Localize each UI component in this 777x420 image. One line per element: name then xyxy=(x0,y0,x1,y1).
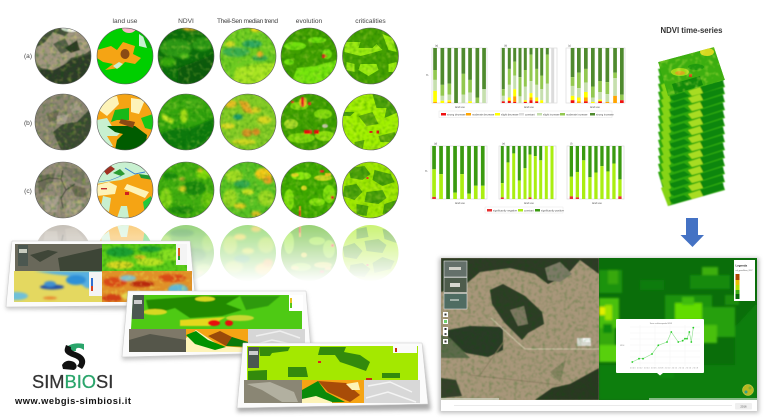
b trend xyxy=(220,94,276,150)
stacked bars chart d xyxy=(432,146,485,199)
circle grid: row b xyxy=(35,94,398,150)
row labels: (c) xyxy=(24,188,32,195)
b evolution xyxy=(281,94,337,150)
logo wordmark: SIMBIOSI xyxy=(32,371,113,392)
b land use xyxy=(97,94,153,150)
time slider bar xyxy=(441,400,757,411)
chart labels: land use xyxy=(592,201,602,205)
a land use xyxy=(97,23,153,84)
satellite map xyxy=(441,258,599,400)
a criticalities xyxy=(342,28,398,84)
legend row 1: moderate decrease xyxy=(472,112,495,116)
heading: column titles: Theil-Sen median trend xyxy=(217,18,278,25)
mini NDVI gauge xyxy=(742,384,754,396)
panel: map card 1 xyxy=(4,241,198,310)
b NDVI xyxy=(158,94,214,150)
stacked bars chart f xyxy=(570,146,622,199)
panel: map card 3 xyxy=(237,343,431,412)
chart labels: (a) xyxy=(435,44,438,48)
chart labels: % xyxy=(426,73,429,77)
chart labels: land use xyxy=(524,105,534,109)
popup line chart: Serie multitemporale NDVI xyxy=(650,322,673,325)
circle grid: row a xyxy=(35,23,398,84)
chart labels xyxy=(426,44,600,109)
row labels: (a) xyxy=(24,53,32,60)
heading: column titles xyxy=(113,18,386,25)
title: NDVI time-series: NDVI time-series xyxy=(661,26,723,35)
NDVI raster map xyxy=(599,258,757,400)
legend row 2: significantly positive xyxy=(541,208,564,212)
satellite strip xyxy=(15,244,102,271)
chart frames xyxy=(432,48,625,103)
stacked bars chart a xyxy=(433,48,486,103)
heading: column titles: criticalities xyxy=(355,18,386,25)
chart labels xyxy=(425,142,602,205)
stacked bars chart c xyxy=(570,48,624,103)
legend row 1: strong decrease xyxy=(447,112,466,116)
bar charts row 2 xyxy=(425,142,624,213)
c trend xyxy=(220,162,276,218)
popup line chart: NDVI xyxy=(620,345,625,347)
bottom strip card 3 xyxy=(244,380,420,403)
chart labels: (f) xyxy=(570,142,573,146)
chart frames xyxy=(431,146,624,199)
legend row 2 xyxy=(485,207,564,213)
stacked bars chart e xyxy=(500,146,554,199)
legend row 2: significantly negative xyxy=(493,208,517,212)
legend of card 2 xyxy=(289,295,303,311)
chart labels: land use xyxy=(524,201,534,205)
arrow down xyxy=(680,218,704,247)
chart labels: (c) xyxy=(568,44,571,48)
legend row 2: constant xyxy=(524,208,534,212)
a satellite xyxy=(35,24,91,84)
legend row 1: moderate increase xyxy=(566,112,588,116)
logo: Simbiosi mark xyxy=(62,343,85,370)
c land use xyxy=(97,162,153,218)
NDVI layer stack xyxy=(655,45,727,206)
website url: www.webgis-simbiosi.it xyxy=(14,396,131,406)
circle outlines xyxy=(35,28,398,218)
heading: column titles: land use xyxy=(113,18,138,25)
reflection of row c xyxy=(38,225,398,278)
c criticalities xyxy=(342,162,398,218)
blue and yellow map xyxy=(14,271,102,302)
legend: col_greenNess_2017 xyxy=(736,270,752,272)
chart labels: (b) xyxy=(504,44,507,48)
red and blue map xyxy=(102,271,192,302)
legend: Legenda xyxy=(736,264,747,268)
circle grid: row c xyxy=(35,162,398,218)
legend row 1: slight increase xyxy=(543,112,560,116)
chart labels: (e) xyxy=(502,142,505,146)
time slider bar: 2016 xyxy=(740,405,747,409)
chart labels: land use xyxy=(455,105,465,109)
popup line chart: 2000 2002 2004 2006 2008 2010 2012 2014 2016 2018 xyxy=(630,368,698,370)
panel: map card 2 xyxy=(122,291,313,360)
legend row 1 xyxy=(439,111,614,118)
c evolution xyxy=(281,162,337,218)
bottom strip card 2 xyxy=(129,329,305,352)
legend row 1: constant xyxy=(525,112,535,116)
chart labels: land use xyxy=(455,201,465,205)
b criticalities xyxy=(342,94,398,150)
popup line chart xyxy=(616,319,704,376)
legend row 1: slight decrease xyxy=(501,112,519,116)
top layer xyxy=(658,47,725,96)
a trend xyxy=(220,26,276,84)
stacked bars chart b xyxy=(502,48,554,103)
bar charts row 1 xyxy=(426,44,625,118)
b satellite xyxy=(35,94,91,150)
trend strip xyxy=(102,244,187,271)
a evolution xyxy=(281,28,337,84)
panel: webgis map xyxy=(439,258,759,413)
map tool buttons xyxy=(443,312,448,344)
c NDVI xyxy=(158,162,214,218)
chart labels: % xyxy=(425,169,428,173)
legend xyxy=(734,260,755,301)
heading: column titles: evolution xyxy=(296,18,323,25)
heading: column titles: NDVI xyxy=(178,18,194,25)
chart labels: land use xyxy=(590,105,600,109)
a NDVI xyxy=(158,25,214,84)
thumbnails xyxy=(444,261,467,309)
criticalities map xyxy=(247,346,418,380)
evolution map xyxy=(131,295,303,329)
row labels xyxy=(24,53,32,195)
chart labels: (d) xyxy=(434,142,437,146)
row labels: (b) xyxy=(24,120,32,127)
c satellite xyxy=(35,162,91,218)
legend row 1: strong increase xyxy=(596,112,614,116)
